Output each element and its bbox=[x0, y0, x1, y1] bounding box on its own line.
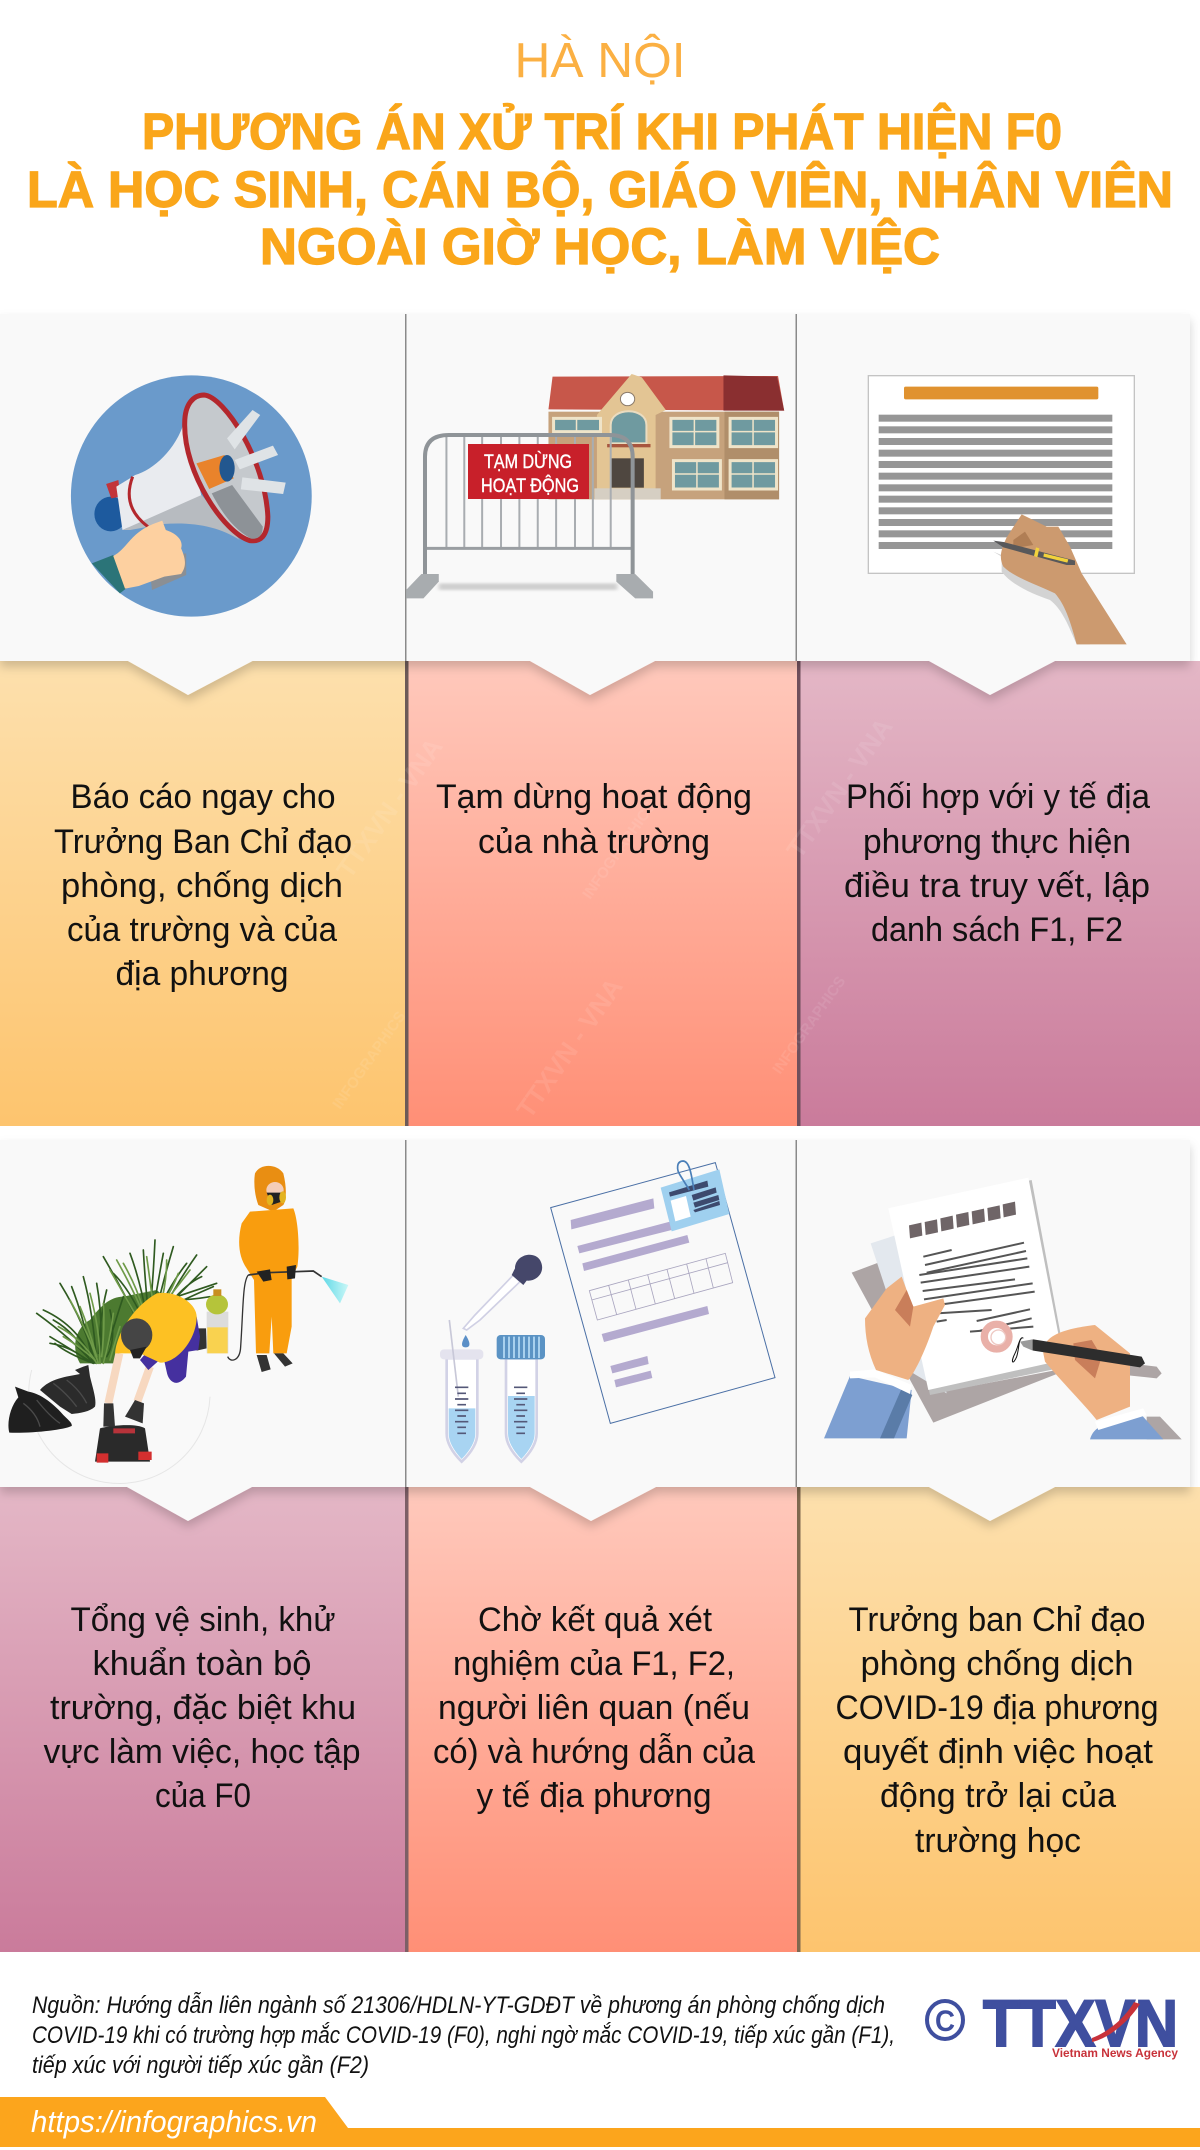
worker shoe bbox=[197, 1328, 207, 1351]
row 2 colour bands bbox=[0, 1487, 1200, 1952]
plant dark blades bbox=[37, 1240, 217, 1363]
panel 4 background bbox=[0, 1140, 405, 1521]
palm shade bbox=[1013, 532, 1033, 548]
band: step 3 bbox=[800, 661, 1200, 1126]
sign: Tạm dừng hoạt động bbox=[468, 444, 589, 499]
line: Trưởng Ban Chỉ đạo bbox=[54, 823, 352, 861]
arched window bbox=[611, 411, 646, 443]
band: step 4 bbox=[0, 1487, 405, 1952]
bell interior shadow bbox=[212, 485, 263, 539]
band: step 1 bbox=[0, 661, 405, 1126]
hand shadow bbox=[993, 552, 1090, 644]
barrier rail bbox=[425, 547, 633, 550]
boots bbox=[257, 1353, 293, 1372]
paper bbox=[868, 376, 1134, 573]
icon: test tubes and medical record bbox=[440, 1161, 775, 1462]
stamp bbox=[984, 1324, 1009, 1349]
line: nghiệm của F1, F2, bbox=[453, 1645, 735, 1683]
bag front bbox=[95, 1425, 150, 1462]
red ring on body bbox=[129, 477, 148, 527]
copyright C: C bbox=[935, 2005, 955, 2038]
line: Báo cáo ngay cho bbox=[70, 778, 336, 816]
clock bbox=[620, 392, 635, 406]
left sleeve shade bbox=[880, 1388, 912, 1438]
line: quyết định việc hoạt bbox=[843, 1733, 1154, 1771]
signature bbox=[1012, 1338, 1023, 1362]
thin arc bbox=[29, 1370, 210, 1483]
right wing wall bbox=[724, 412, 779, 499]
line: địa phương bbox=[116, 955, 288, 993]
source line 2: COVID-19 khi có trường hợp mắc COVID-19 (F0), nghi ngờ mắc COVID-19, tiếp xúc gần (F1), bbox=[32, 2022, 895, 2049]
dropper bulb bbox=[512, 1255, 542, 1285]
panel 3 background bbox=[796, 314, 1190, 695]
swab bbox=[449, 1320, 458, 1397]
stamp inner ring bbox=[991, 1330, 1006, 1345]
main paper bbox=[888, 1178, 1063, 1390]
copyright ring bbox=[927, 2001, 963, 2039]
pen bbox=[993, 541, 1075, 565]
respirator bbox=[267, 1193, 283, 1205]
divider row 1 right bbox=[796, 314, 797, 661]
watermark text: TTXVN - VNA bbox=[510, 972, 629, 1123]
sound ray top bbox=[227, 410, 260, 449]
tube 1 ticks bbox=[455, 1387, 468, 1433]
bag back bbox=[40, 1365, 95, 1414]
icon: hands signing a document bbox=[824, 1178, 1182, 1439]
divider row 2 right bbox=[796, 1140, 797, 1487]
spray wand bbox=[248, 1271, 322, 1277]
line: Tạm dừng hoạt động bbox=[436, 778, 752, 816]
line: COVID-19 địa phương bbox=[836, 1689, 1158, 1727]
footer bar with URL bbox=[0, 2097, 1200, 2147]
gray handle bbox=[148, 553, 186, 590]
panel dividers bbox=[405, 314, 797, 1487]
tube 1 liquid bbox=[449, 1408, 475, 1459]
porch bbox=[607, 444, 651, 447]
window bbox=[730, 418, 777, 447]
left sleeve bbox=[824, 1376, 912, 1438]
line: trường, đặc biệt khu bbox=[50, 1689, 356, 1727]
cuff bbox=[92, 555, 128, 593]
suit hood bbox=[254, 1166, 286, 1212]
window bbox=[554, 418, 601, 432]
bag contents bbox=[113, 1428, 135, 1433]
watermark text: INFOGRAPHICS bbox=[579, 798, 659, 902]
paper clip bbox=[678, 1161, 694, 1190]
bag folds bbox=[23, 1380, 87, 1427]
worker trousers bbox=[140, 1317, 200, 1383]
steps bbox=[594, 488, 661, 499]
icon: hand writing on document bbox=[868, 376, 1134, 644]
bag left bbox=[8, 1387, 72, 1433]
worker head bbox=[121, 1318, 152, 1352]
blue ID card bbox=[661, 1169, 729, 1231]
line: có) và hướng dẫn của bbox=[433, 1733, 755, 1771]
window mullions bbox=[577, 418, 777, 489]
sound ray middle bbox=[235, 446, 278, 469]
source note bbox=[32, 1991, 895, 2079]
megaphone back cap bbox=[94, 497, 127, 531]
paper shadow bbox=[892, 1180, 1067, 1395]
tank cap bbox=[213, 1289, 221, 1296]
line: khuẩn toàn bộ bbox=[92, 1645, 312, 1683]
card photo bbox=[671, 1196, 691, 1221]
line: vực làm việc, học tập bbox=[44, 1733, 360, 1771]
watermark text: TTXVN - VNA bbox=[330, 732, 449, 883]
line: Trưởng ban Chỉ đạo bbox=[848, 1601, 1146, 1639]
pen yellow clip bbox=[1043, 553, 1068, 563]
speaker cylinder bbox=[196, 455, 234, 489]
red clip bbox=[106, 480, 120, 498]
text: step 4 bbox=[44, 1601, 360, 1815]
tank liquid bbox=[207, 1327, 228, 1353]
plant base bbox=[75, 1290, 177, 1363]
text: step 6 bbox=[836, 1601, 1158, 1860]
text: step 2 bbox=[436, 778, 752, 861]
window bbox=[671, 418, 718, 447]
left cuff bbox=[850, 1369, 912, 1394]
tube 2 ticks bbox=[514, 1387, 527, 1433]
tube 1 bbox=[447, 1358, 477, 1462]
roof bbox=[548, 376, 784, 411]
worker shirt bbox=[115, 1293, 197, 1363]
hand bbox=[113, 521, 185, 589]
panel 5 background bbox=[405, 1140, 796, 1521]
watermark text: INFOGRAPHICS bbox=[329, 1008, 409, 1112]
pen shadow bbox=[1077, 1357, 1162, 1378]
band: step 6 bbox=[800, 1487, 1200, 1952]
window bbox=[730, 461, 777, 489]
worker mask bbox=[130, 1347, 147, 1358]
suit gloves bbox=[257, 1265, 296, 1282]
text: step 1 bbox=[54, 778, 352, 993]
barrier foot right bbox=[616, 574, 653, 598]
line: của trường và của bbox=[67, 911, 337, 949]
panel 2 background bbox=[405, 314, 796, 695]
right sleeve shadow bbox=[1147, 1417, 1182, 1439]
spilled items bbox=[97, 1452, 152, 1463]
URL: https://infographics.vn bbox=[31, 2104, 317, 2139]
blue circle bbox=[71, 375, 312, 617]
tube 2 bbox=[506, 1358, 537, 1462]
line: danh sách F1, F2 bbox=[871, 911, 1123, 949]
heading line 2: LÀ HỌC SINH, CÁN BỘ, GIÁO VIÊN, NHÂN VIÊN bbox=[27, 160, 1173, 218]
line: phòng chống dịch bbox=[860, 1645, 1134, 1683]
line: động trở lại của bbox=[880, 1777, 1116, 1815]
row 1 colour bands bbox=[0, 661, 1200, 1126]
line: phương thực hiện bbox=[863, 823, 1131, 861]
line: phòng, chống dịch bbox=[61, 867, 343, 905]
door bbox=[611, 458, 644, 488]
right cuff bbox=[1095, 1408, 1147, 1430]
hose bbox=[228, 1275, 248, 1360]
line: Phối hợp với y tế địa bbox=[846, 778, 1150, 816]
cap stripes bbox=[504, 1337, 539, 1358]
left hand bbox=[865, 1277, 945, 1380]
line: của nhà trường bbox=[478, 823, 710, 861]
barrier foot left bbox=[406, 574, 439, 598]
sign line 1: TẠM DỪNG bbox=[484, 451, 572, 473]
purple text bars bbox=[571, 1198, 709, 1387]
pen body bbox=[1023, 1339, 1145, 1367]
subtitle: Hà Nội: HÀ NỘI bbox=[514, 34, 686, 88]
suit body bbox=[239, 1208, 299, 1353]
tube 2 cap bbox=[497, 1335, 545, 1359]
speaker rim bbox=[219, 455, 235, 482]
record sheet bbox=[551, 1163, 775, 1423]
window bbox=[673, 461, 720, 489]
panel 6 background bbox=[796, 1140, 1190, 1521]
heading line 3: NGOÀI GIỜ HỌC, LÀM VIỆC bbox=[260, 217, 940, 275]
band: step 2 bbox=[408, 661, 797, 1126]
table grid bbox=[589, 1253, 733, 1320]
row 1 image panels bbox=[0, 314, 1190, 695]
front gable bbox=[597, 374, 666, 499]
line: trường học bbox=[915, 1822, 1081, 1860]
orange title bar bbox=[904, 387, 1098, 399]
right hand bbox=[1043, 1325, 1130, 1420]
filters bbox=[267, 1195, 273, 1205]
hand bbox=[1001, 514, 1127, 644]
barrier ground shadow bbox=[439, 583, 617, 590]
band: step 5 bbox=[408, 1487, 797, 1952]
watermark text: INFOGRAPHICS bbox=[769, 973, 849, 1077]
line: Tổng vệ sinh, khử bbox=[70, 1601, 336, 1639]
watermark text: TTXVN - VNA bbox=[780, 712, 899, 863]
dropper glass bbox=[463, 1275, 520, 1330]
tube 1 cap bbox=[440, 1349, 483, 1359]
divider row 2 left bbox=[405, 1140, 406, 1487]
dark roof side bbox=[723, 375, 784, 411]
text: step 5 bbox=[433, 1601, 755, 1815]
orange bar and tab bbox=[0, 2097, 1200, 2147]
glove left bbox=[103, 1403, 115, 1427]
horn lower bbox=[122, 495, 240, 540]
text lines bbox=[879, 415, 1112, 549]
icon: school behind barrier bbox=[406, 374, 784, 598]
line: người liên quan (nếu bbox=[438, 1689, 750, 1727]
right sleeve bbox=[1090, 1415, 1163, 1439]
glove right bbox=[125, 1400, 144, 1423]
spray mist bbox=[322, 1277, 348, 1303]
watermarks bbox=[329, 712, 899, 1123]
header squares bbox=[909, 1202, 1016, 1238]
panel 1 background bbox=[0, 314, 405, 695]
sign line 2: HOẠT ĐỘNG bbox=[481, 475, 579, 497]
plant light blades bbox=[58, 1257, 190, 1363]
filter right bbox=[279, 1191, 286, 1203]
heading line 1: PHƯƠNG ÁN XỬ TRÍ KHI PHÁT HIỆN F0 bbox=[142, 102, 1062, 160]
card lines bbox=[669, 1181, 720, 1212]
icon: hand holding megaphone on blue circle bbox=[71, 375, 312, 617]
barrier frame bbox=[425, 435, 633, 583]
title block bbox=[27, 34, 1173, 275]
source line 3: tiếp xúc với người tiếp xúc gần (F2) bbox=[32, 2052, 369, 2079]
tube 2 liquid bbox=[508, 1396, 535, 1459]
back sheet bbox=[871, 1232, 947, 1393]
tank top bbox=[206, 1294, 228, 1314]
band divider right bbox=[797, 1487, 800, 1952]
line: điều tra truy vết, lập bbox=[844, 867, 1150, 905]
back folder bbox=[852, 1263, 1058, 1423]
text: step 3 bbox=[844, 778, 1150, 949]
red swoosh on V bbox=[1092, 2002, 1140, 2042]
drop bbox=[462, 1335, 469, 1347]
spray tank bbox=[207, 1312, 228, 1353]
source line 1: Nguồn: Hướng dẫn liên ngành số 21306/HDLN-YT-GDĐT về phương án phòng chống dịch bbox=[32, 1991, 885, 2019]
barrier bars bbox=[446, 435, 611, 548]
worker arms bbox=[108, 1353, 150, 1403]
band divider left bbox=[405, 1487, 408, 1952]
band divider left bbox=[405, 661, 408, 1126]
face bbox=[266, 1182, 284, 1198]
logo: TTXVN bbox=[927, 1986, 1178, 2060]
bell interior bbox=[185, 395, 268, 541]
agency name: Vietnam News Agency bbox=[1052, 2046, 1178, 2060]
pen tip bbox=[1020, 1339, 1033, 1351]
school walls bbox=[548, 412, 779, 499]
band divider right bbox=[797, 661, 800, 1126]
icon: cleaning workers with sprayer and garbage bags bbox=[8, 1166, 348, 1483]
line: Chờ kết quả xét bbox=[478, 1601, 713, 1639]
horn upper bbox=[116, 421, 202, 530]
wavy text lines bbox=[919, 1243, 1035, 1332]
left palm shade bbox=[895, 1290, 913, 1327]
row 2 image panels bbox=[0, 1140, 1190, 1521]
line: của F0 bbox=[155, 1777, 251, 1815]
pen yellow band bbox=[1034, 547, 1039, 557]
line: y tế địa phương bbox=[476, 1777, 712, 1815]
red sign plate bbox=[468, 444, 589, 499]
divider row 1 left bbox=[405, 314, 406, 661]
wordmark: TTXVN bbox=[983, 1986, 1178, 2060]
right palm shade bbox=[1073, 1340, 1102, 1378]
sound ray bottom bbox=[241, 477, 286, 494]
